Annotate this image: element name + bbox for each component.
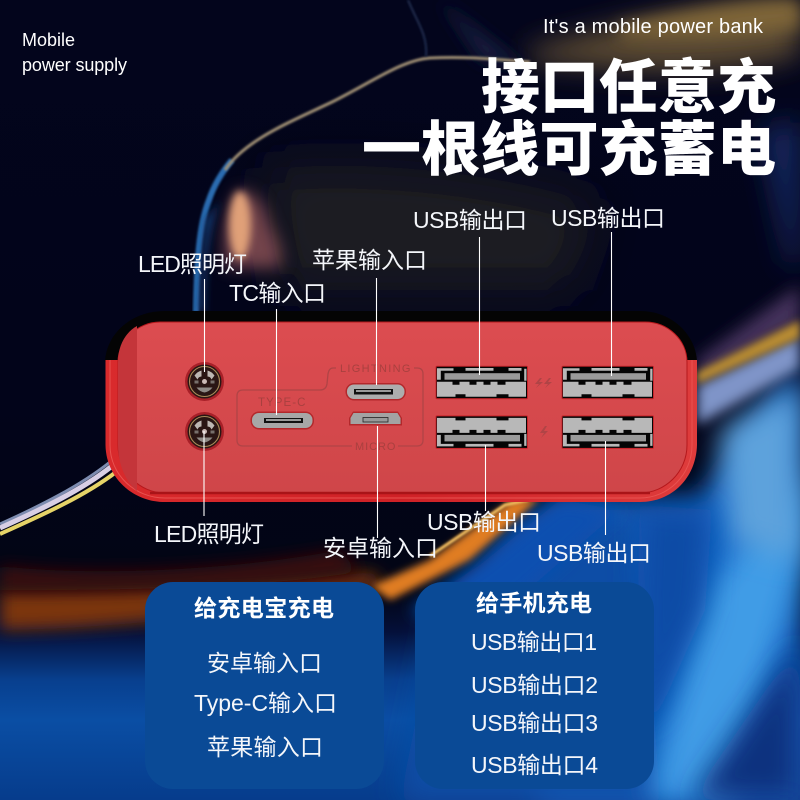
curved arc: blue: [196, 160, 232, 312]
label: USB output bottom left: USB输出口: [427, 509, 541, 535]
title: 一根线可充蓄电: [362, 117, 776, 183]
text: Type-C input: Type-C输入口: [194, 690, 337, 716]
silkscreen label: LIGHTNING: LIGHTNING: [340, 363, 411, 375]
red front face: [118, 322, 687, 493]
text: Apple input: 苹果输入口: [207, 734, 323, 760]
title: [362, 55, 776, 183]
port: USB 4: [562, 415, 654, 449]
lower-left orange band: [0, 572, 385, 630]
orange glow by arc: [224, 190, 281, 268]
text: USB output 4: USB输出口4: [471, 752, 598, 778]
icon: double bolt: [535, 378, 552, 388]
panel heading: 给充电宝充电: [194, 595, 334, 621]
port: Micro USB: [349, 412, 402, 426]
icon: LED lights: [185, 362, 224, 451]
red outer shell: [106, 360, 697, 502]
port: Type-C: [250, 412, 314, 430]
charging cable: [0, 462, 116, 534]
black top casing: [105, 311, 697, 362]
center smoky shape: [262, 166, 600, 290]
label: USB output top right: USB输出口: [551, 205, 665, 231]
text: Mobile power supply: power supply: [22, 55, 127, 75]
port: Lightning: [346, 383, 406, 400]
label: Android input: 安卓输入口: [323, 535, 438, 561]
panel heading: 给手机充电: [476, 590, 592, 616]
icon: single bolt: [540, 426, 548, 438]
label: Apple input: 苹果输入口: [312, 247, 427, 273]
leader lines: [204, 232, 612, 538]
title: 接口任意充: [481, 55, 776, 121]
top-right tan glow: [530, 0, 800, 71]
label: TC input: TC输入口: [229, 280, 326, 306]
text: Android input: 安卓输入口: [207, 650, 322, 676]
text: USB output 2: USB输出口2: [471, 672, 598, 698]
text: USB output 1: USB输出口1: [471, 629, 597, 655]
port: USB 2: [562, 366, 654, 399]
right blue field: [500, 360, 800, 800]
curved arc: tan: [225, 57, 530, 170]
text: English tagline: It's a mobile power bank: [543, 16, 764, 38]
port: USB 3: [436, 415, 528, 449]
power bank body: [105, 311, 697, 502]
label: LED top: LED照明灯: [138, 251, 247, 277]
panel: charge the phone: [415, 582, 654, 789]
center orange flare: [372, 498, 540, 600]
silkscreen label: TYPE-C: TYPE-C: [258, 397, 306, 409]
text: Mobile power supply: Mobile: [22, 30, 75, 50]
silkscreen port bracket: [237, 368, 423, 446]
port: USB 1: [436, 366, 528, 399]
label: LED bottom: LED照明灯: [154, 521, 264, 547]
label: USB output bottom right: USB输出口: [537, 540, 651, 566]
text: Mobile power supply: [22, 30, 127, 75]
label: USB output top left: USB输出口: [413, 207, 527, 233]
right diagonal flare: [697, 285, 800, 380]
text: USB output 3: USB输出口3: [471, 710, 598, 736]
silkscreen label: MICRO: MICRO: [355, 441, 396, 453]
panel: charge the power bank: [145, 582, 384, 789]
